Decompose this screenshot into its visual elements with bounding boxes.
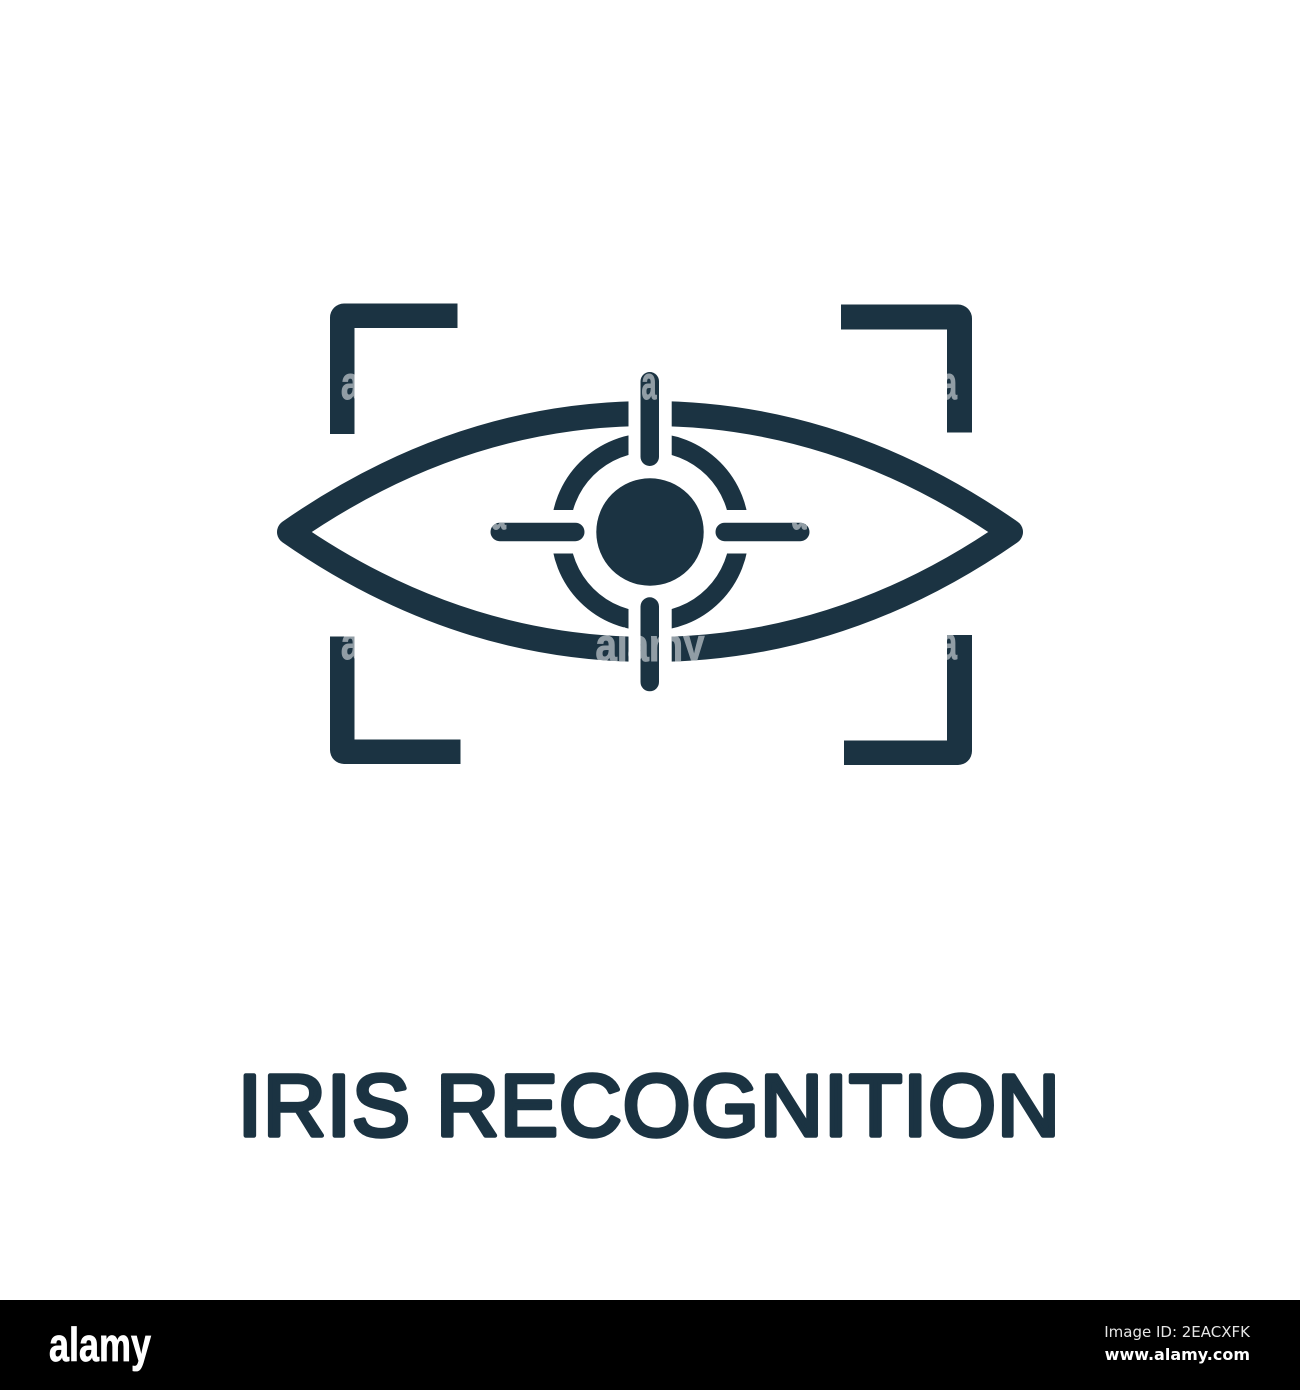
footer image id: Image ID: 2EACXFK xyxy=(1104,1323,1251,1341)
watermark fragments over icon: a xyxy=(642,357,657,409)
icon: top crosshair tick xyxy=(640,372,659,466)
icon: bottom-right scan bracket xyxy=(844,635,972,765)
icon: top-right scan bracket xyxy=(841,304,972,432)
icon: bottom-left scan bracket xyxy=(330,636,460,764)
icon: iris ring xyxy=(560,442,740,622)
watermark fragments over icon: alamy xyxy=(596,619,705,671)
watermark fragments over icon: a xyxy=(941,357,957,409)
footer bar xyxy=(0,1300,1300,1390)
footer website: www.alamy.com xyxy=(1105,1345,1250,1364)
icon: left crosshair tick xyxy=(490,523,584,541)
icon: pupil xyxy=(596,478,704,586)
watermark fragments over icon: a xyxy=(491,487,506,539)
icon: bottom crosshair tick xyxy=(640,597,659,691)
watermark fragments over icon: a xyxy=(792,487,807,539)
watermark fragments over icon: a xyxy=(941,617,957,669)
icon: iris recognition eye in scan frame xyxy=(290,304,1010,765)
footer logo: alamy xyxy=(49,1318,151,1371)
icon: right crosshair tick xyxy=(716,523,810,541)
watermark fragments over icon xyxy=(341,357,957,671)
watermark fragments over icon: a xyxy=(341,357,360,409)
watermark fragments over icon: a xyxy=(341,617,360,669)
icon: eye outline xyxy=(290,414,1010,650)
icon: top-left scan bracket xyxy=(330,304,458,434)
title: IRIS RECOGNITION xyxy=(238,1058,1060,1154)
